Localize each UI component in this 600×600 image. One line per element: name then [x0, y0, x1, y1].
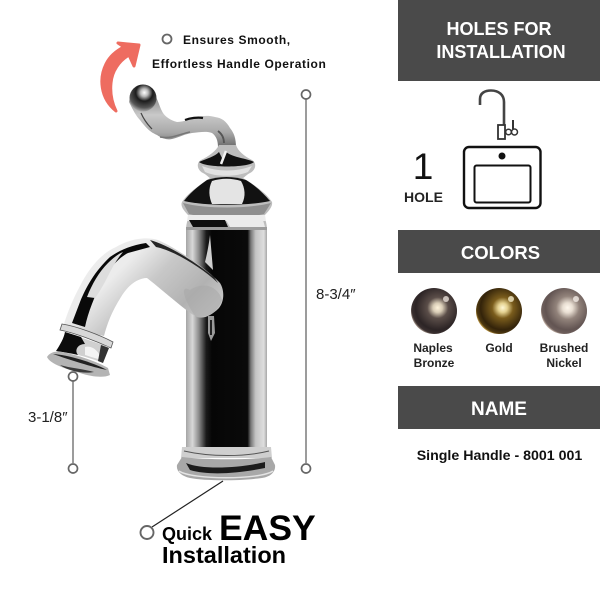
- body highlights: [205, 235, 215, 341]
- faucet illustration: [47, 84, 275, 480]
- faucet base: [177, 447, 275, 480]
- callout: smooth handle operation: [152, 33, 326, 71]
- heading: name: NAME: [471, 399, 527, 420]
- heading: holes for installation: HOLES FOR: [446, 19, 552, 39]
- faucet spout: [47, 238, 223, 377]
- callout: smooth handle operation: Effortless Handle Operation: [152, 57, 326, 71]
- heading: holes for installation: [398, 0, 600, 81]
- callout: quick easy installation: [140, 481, 316, 568]
- swatch: brushed nickel: Brushed: [540, 341, 588, 355]
- faucet body column: [186, 230, 267, 452]
- callout: quick easy installation: EASY: [219, 508, 316, 548]
- hole count: 1: [413, 146, 433, 187]
- icon: faucet on sink: [464, 90, 540, 208]
- hole count: [404, 146, 443, 205]
- heading: colors: [398, 230, 600, 273]
- product name: Single Handle - 8001 001: [417, 448, 582, 464]
- dimension: height 8-3/4: [302, 90, 356, 473]
- callout: smooth handle operation: Ensures Smooth,: [183, 33, 291, 47]
- dimension: height 8-3/4: 8-3/4″: [316, 286, 356, 303]
- dimension: spout clearance 3-1/8: [28, 372, 78, 473]
- arrow: handle rotation: [102, 43, 139, 111]
- swatch: gold: Gold: [485, 341, 513, 355]
- callout: quick easy installation: Quick: [162, 524, 213, 544]
- swatch: gold: [476, 288, 522, 355]
- heading: name: [398, 386, 600, 429]
- swatch: naples bronze: Bronze: [414, 356, 455, 370]
- swatch: naples bronze: [411, 288, 457, 370]
- faucet handle lever: [129, 84, 236, 148]
- heading: holes for installation: INSTALLATION: [436, 42, 566, 62]
- hole count: HOLE: [404, 189, 443, 205]
- heading: colors: COLORS: [461, 242, 540, 263]
- swatch: naples bronze: Naples: [413, 341, 453, 355]
- swatch: brushed nickel: Nickel: [546, 356, 582, 370]
- faucet cap: [181, 145, 272, 232]
- swatch: brushed nickel: [540, 288, 588, 370]
- dimension: spout clearance 3-1/8: 3-1/8″: [28, 409, 68, 426]
- callout: quick easy installation: Installation: [162, 542, 286, 568]
